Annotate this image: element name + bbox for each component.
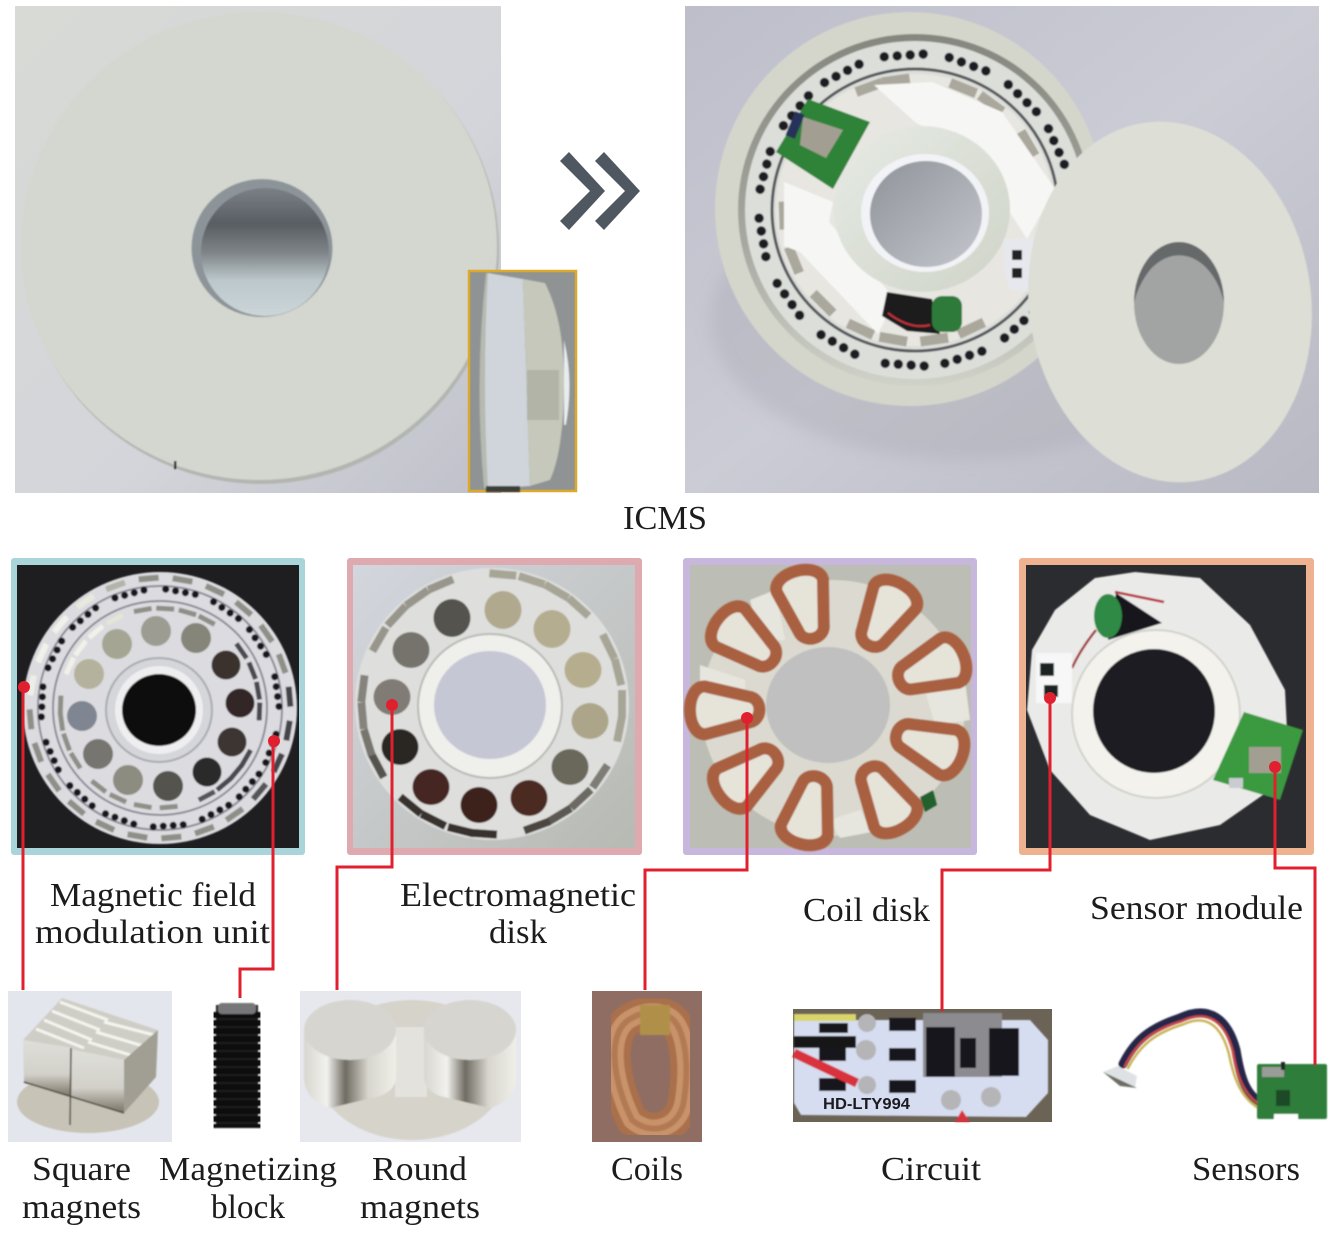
label: magnetic field modulation unit: Magnetic field bbox=[50, 877, 256, 914]
battery and green board bbox=[1072, 592, 1164, 668]
small mark bbox=[174, 461, 176, 469]
bearing and hole bbox=[106, 658, 212, 762]
label: electromagnetic disk: disk bbox=[489, 914, 547, 951]
outer segments bbox=[357, 569, 626, 839]
outer segment magnets bbox=[27, 575, 293, 841]
board marking: HD-LTY994 bbox=[823, 1096, 910, 1113]
panel: electromagnetic disk bbox=[347, 558, 642, 855]
label: electromagnetic disk: Electromagnetic bbox=[400, 877, 636, 914]
taped disc bbox=[1027, 572, 1287, 840]
inner segment magnets bbox=[58, 606, 262, 810]
photo: coil bbox=[592, 991, 702, 1142]
label: square magnets: Square bbox=[32, 1151, 131, 1188]
callout lines bbox=[23, 688, 1315, 1065]
label: circuit: Circuit bbox=[881, 1151, 982, 1188]
label: magnetic field modulation unit bbox=[35, 877, 271, 951]
lid bbox=[1005, 103, 1335, 501]
hub ring bbox=[1072, 630, 1240, 798]
label: sensors: Sensors bbox=[1192, 1151, 1300, 1188]
callout dots bbox=[18, 681, 1281, 773]
coils bbox=[690, 565, 972, 850]
photo: magnetizing block bbox=[216, 1003, 258, 1128]
label: magnetic field modulation unit: modulation unit bbox=[35, 914, 271, 951]
label: coils: Coils bbox=[611, 1151, 683, 1188]
arrow: double chevron bbox=[560, 152, 640, 230]
photo: circuit bbox=[793, 1009, 1052, 1122]
main PCB bbox=[776, 99, 870, 189]
tape bbox=[784, 82, 1055, 334]
dot groups bbox=[38, 585, 283, 831]
disc edge shadow bbox=[23, 14, 499, 484]
round magnets bbox=[67, 616, 254, 801]
tape patches bbox=[700, 590, 970, 838]
label: magnetizing block bbox=[159, 1151, 337, 1226]
hub ring bbox=[834, 126, 1010, 292]
panel: sensor module bbox=[1019, 558, 1314, 855]
round magnets bbox=[374, 591, 608, 823]
label: round magnets: Round bbox=[372, 1151, 467, 1188]
label: coil disk: Coil disk bbox=[803, 892, 930, 929]
main green board bbox=[1213, 712, 1303, 800]
panel: magnetic field modulation unit bbox=[11, 558, 305, 855]
label: magnetizing block: Magnetizing bbox=[159, 1151, 337, 1188]
photo: round magnets bbox=[300, 991, 521, 1142]
label: round magnets bbox=[360, 1151, 480, 1226]
housing outer ring bbox=[715, 12, 1105, 406]
small circuit board bbox=[1036, 653, 1072, 703]
disc bbox=[355, 568, 629, 840]
photo: square magnets bbox=[8, 991, 172, 1142]
heading: ICMS: ICMS bbox=[623, 500, 707, 537]
inset: side view of ICMS bbox=[469, 271, 576, 492]
label: square magnets: magnets bbox=[22, 1189, 141, 1226]
battery and small board bbox=[882, 239, 1035, 334]
photo: assembled ICMS disc bbox=[15, 6, 501, 493]
label: electromagnetic disk bbox=[400, 877, 636, 951]
dot ring bbox=[753, 49, 1076, 371]
label: magnetizing block: block bbox=[211, 1189, 285, 1226]
small green board bbox=[920, 790, 937, 812]
photo: sensors bbox=[1103, 1013, 1327, 1120]
label: square magnets bbox=[22, 1151, 141, 1226]
centre hole bbox=[192, 179, 332, 317]
disc face bbox=[21, 12, 497, 480]
inner segment magnets bbox=[779, 74, 1039, 347]
panel: coil disk bbox=[683, 558, 977, 855]
label: sensor module: Sensor module bbox=[1090, 890, 1303, 927]
taped ring bbox=[701, 580, 965, 836]
label: round magnets: magnets bbox=[360, 1189, 480, 1226]
photo: opened ICMS with lid bbox=[685, 6, 1335, 501]
disc bbox=[23, 572, 297, 844]
